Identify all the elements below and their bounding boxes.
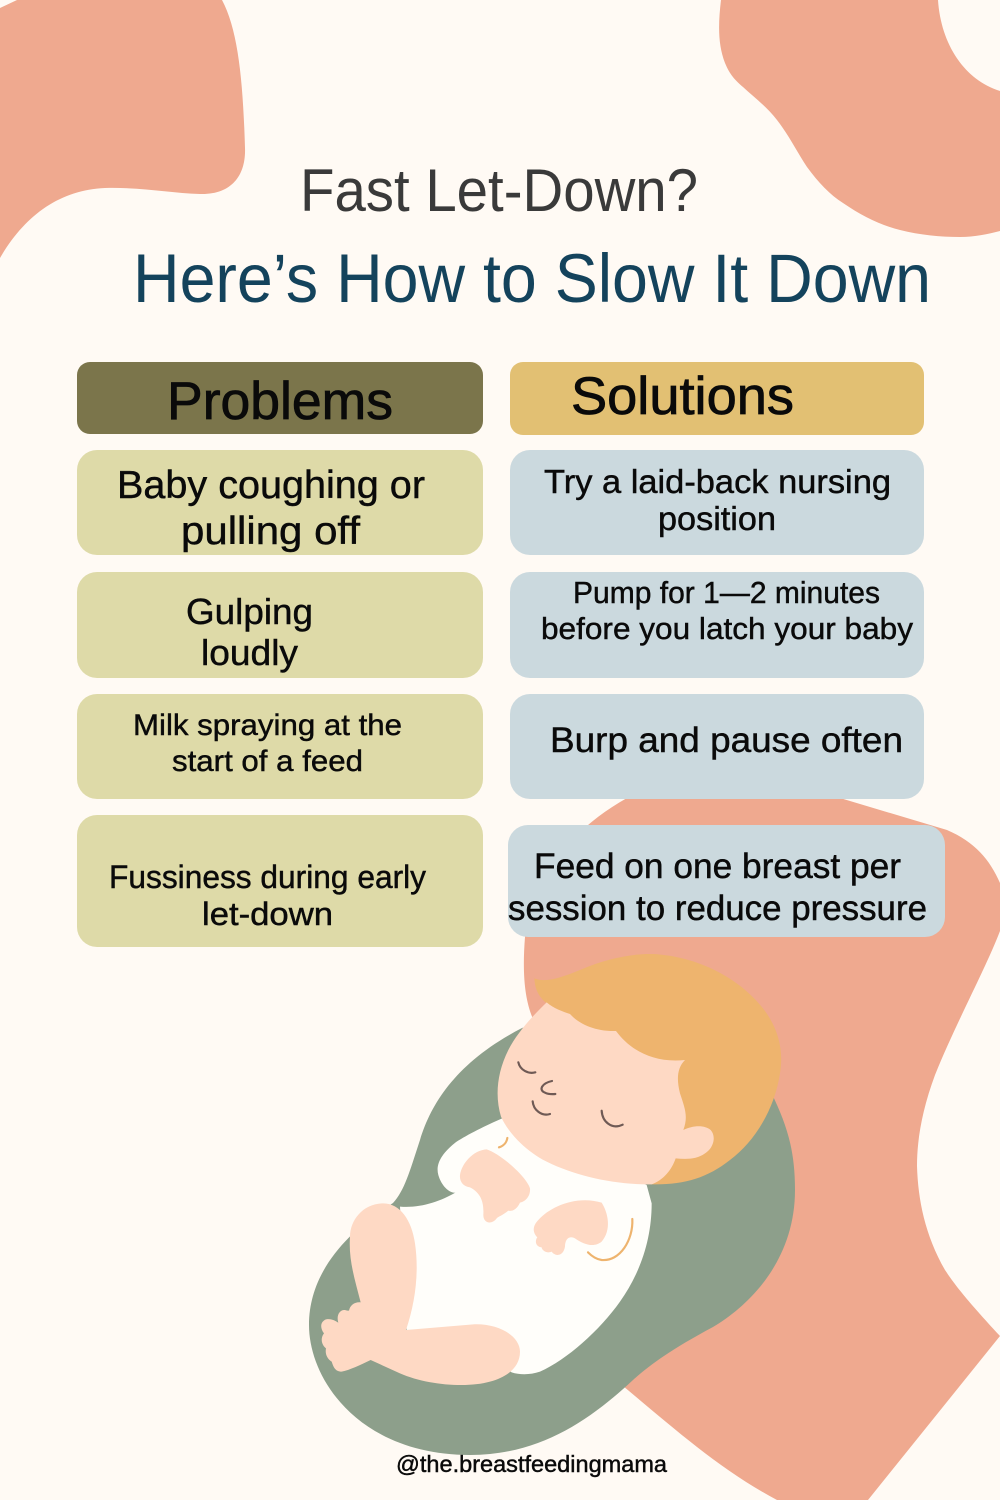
problems header: Problems (167, 372, 393, 431)
problem: baby coughing: pulling off (181, 510, 360, 553)
problem: gulping (77, 572, 483, 678)
right hand (534, 1200, 608, 1255)
bodysuit (400, 1118, 652, 1374)
solution: burp and pause: Burp and pause often (550, 721, 903, 760)
solutions header (510, 362, 924, 435)
sleeve creases (499, 1138, 632, 1260)
problem: gulping: Gulping (186, 591, 313, 632)
problem: milk spraying: Milk spraying at the (133, 709, 402, 742)
solutions header: Solutions (571, 367, 794, 426)
problem: fussiness: Fussiness during early (109, 859, 426, 895)
solution: feed on one breast (508, 825, 945, 937)
solution: pump first (510, 572, 924, 678)
problem: baby coughing (77, 450, 483, 555)
solution: pump first: before you latch your baby (541, 611, 914, 646)
solution: burp and pause (510, 694, 924, 799)
problem: gulping: loudly (201, 632, 298, 673)
panel: solutions column (508, 362, 945, 937)
solution: laid-back position (510, 450, 924, 555)
illustration: sleeping baby on pillow (309, 954, 795, 1455)
solution: feed on one breast: Feed on one breast per (534, 847, 901, 886)
problem: milk spraying: start of a feed (172, 745, 363, 778)
blob: large right (524, 798, 1000, 1500)
panel: problems column (77, 362, 483, 947)
blob: top left (0, 0, 245, 258)
facial features (518, 1062, 623, 1126)
left hand (460, 1149, 530, 1222)
solution: feed on one breast: session to reduce pressure (508, 889, 927, 928)
solution: pump first: Pump for 1—2 minutes (573, 575, 880, 610)
title line one: Fast Let-Down? (300, 157, 698, 224)
face and ear (498, 1002, 714, 1184)
credit handle: @the.breastfeedingmama (396, 1451, 667, 1477)
hair (534, 954, 781, 1184)
problem: fussiness (77, 815, 483, 947)
title line two: Here’s How to Slow It Down (133, 240, 931, 317)
problem: baby coughing: Baby coughing or (117, 464, 425, 507)
solution: laid-back position: Try a laid-back nursing (544, 463, 891, 500)
blob: top right (719, 0, 1000, 237)
problems header (77, 362, 483, 434)
problem: milk spraying (77, 694, 483, 799)
baby figure (321, 954, 781, 1385)
solution: laid-back position: position (658, 500, 776, 537)
problem: fussiness: let-down (202, 896, 333, 932)
legs (321, 1203, 520, 1385)
pillow (309, 1000, 795, 1455)
